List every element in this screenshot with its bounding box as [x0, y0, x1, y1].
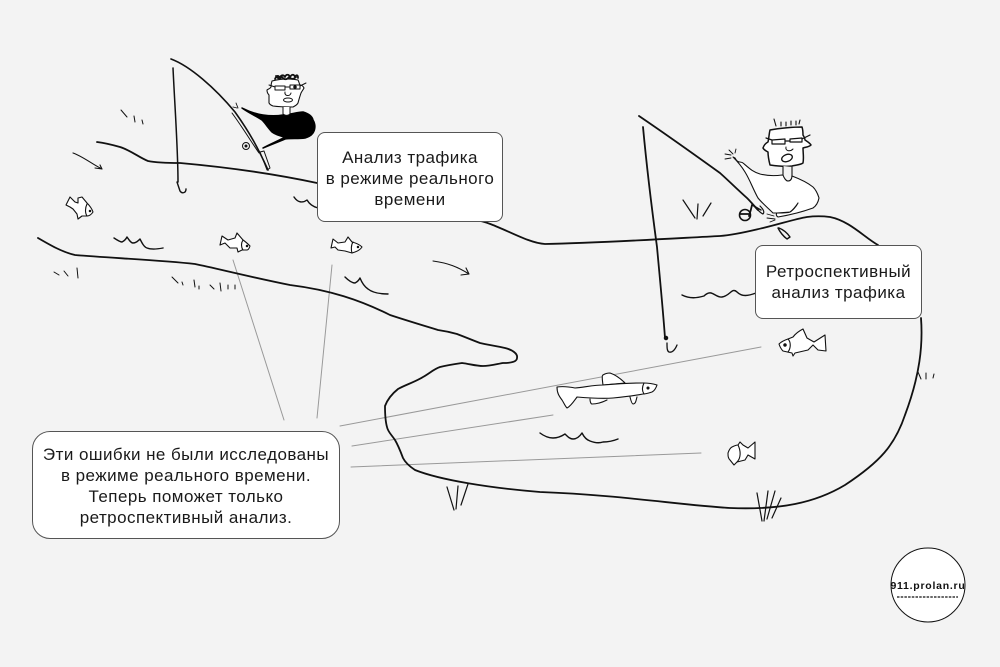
callout: retrospective analysis: Ретроспективный: [766, 262, 911, 281]
reel: [242, 142, 250, 150]
water ripples: [114, 197, 756, 443]
large fish center: [602, 373, 625, 385]
fisherman two in white: [639, 116, 819, 352]
stamp: 911.prolan.ru: 911.prolan.ru: [890, 580, 966, 592]
fish: [66, 197, 826, 465]
small fish right: [331, 237, 362, 253]
head and face: [763, 127, 811, 166]
fishing rod: [171, 59, 268, 170]
callout: retrospective analysis: [755, 245, 922, 319]
mollie fish top right: [779, 329, 826, 356]
callout: errors note: Теперь поможет только: [89, 487, 283, 506]
callout: real-time analysis: Анализ трафика: [342, 148, 478, 167]
pointer lines: [233, 260, 761, 467]
callout: real-time analysis: [317, 132, 503, 222]
short hair: [774, 119, 800, 126]
small fish middle: [220, 233, 250, 252]
callout: errors note: ретроспективный анализ.: [80, 508, 292, 527]
fishing line and hook: [173, 68, 178, 182]
current arrows: [73, 153, 469, 275]
small fish left: [66, 197, 93, 219]
curly hair: [275, 75, 298, 79]
callout: real-time analysis: времени: [374, 190, 446, 209]
hand marks: [725, 149, 736, 159]
callout: real-time analysis: в режиме реального: [326, 169, 494, 188]
reel: [740, 210, 750, 220]
fisherman one in black: [171, 59, 315, 193]
body and arm: [733, 157, 819, 217]
callout: retrospective analysis: анализ трафика: [772, 283, 905, 302]
callout: errors note: Эти ошибки не были исследованы: [43, 445, 329, 464]
grass marks: [54, 110, 934, 521]
fishing rod: [639, 116, 758, 210]
rod handle: [778, 228, 790, 239]
river and lake outline: [38, 142, 922, 508]
fishing line and hook: [643, 127, 665, 338]
callout: errors note: в режиме реального времени.: [61, 466, 311, 485]
grass near rod: [683, 200, 711, 219]
round fish bottom right: [728, 442, 755, 465]
callout: errors note: [32, 431, 340, 539]
black body and arms: [242, 108, 315, 148]
head and face: [267, 79, 304, 107]
